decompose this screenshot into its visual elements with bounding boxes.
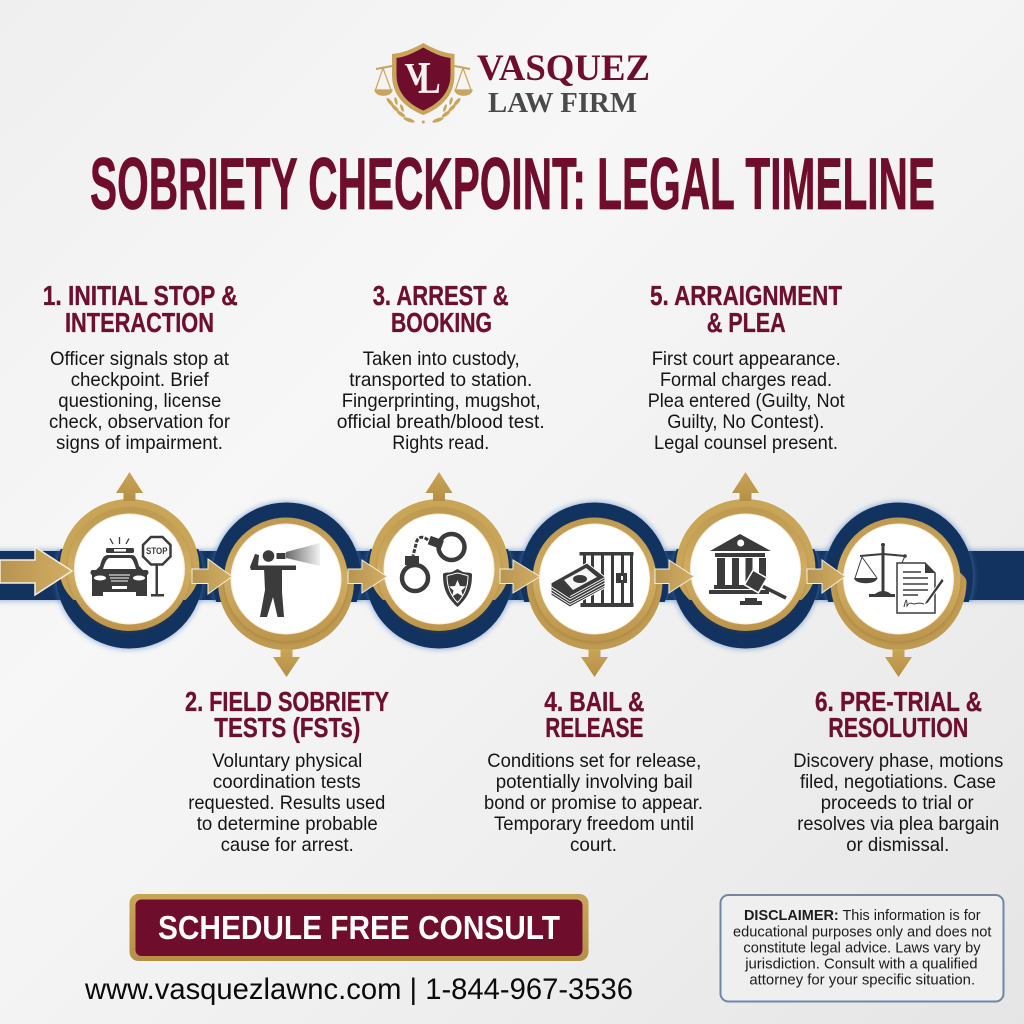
icon: handcuffs and badge bbox=[402, 534, 472, 607]
step 4 node bbox=[519, 502, 670, 652]
step 3 body: Taken into custody, bbox=[363, 348, 520, 370]
step 3 body bbox=[337, 348, 545, 454]
firm name second line: LAW FIRM bbox=[488, 88, 637, 119]
icon: courthouse and gavel bbox=[709, 534, 786, 605]
icon: person with flashlight bbox=[250, 543, 320, 617]
step 6 body: or dismissal. bbox=[846, 834, 949, 856]
timeline band bbox=[0, 550, 1024, 601]
arrow: step 4 to 5 bbox=[655, 560, 694, 593]
step 6 text bbox=[793, 686, 1004, 856]
step 4 heading: RELEASE bbox=[545, 712, 643, 743]
step 4 body: Conditions set for release, bbox=[487, 750, 701, 772]
step 6 heading: RESOLUTION bbox=[828, 712, 968, 743]
step 2 heading: TESTS (FSTs) bbox=[214, 712, 360, 743]
step 4 heading: 4. BAIL & bbox=[544, 686, 644, 717]
step 2 body: requested. Results used bbox=[188, 792, 385, 814]
step 4 body: potentially involving bail bbox=[496, 771, 693, 793]
step 5 text bbox=[648, 280, 845, 454]
step 1 node bbox=[55, 499, 204, 650]
step 3 node bbox=[364, 499, 514, 650]
icon: police car and stop sign: STOP bbox=[146, 546, 168, 556]
step 6 body: Discovery phase, motions bbox=[793, 750, 1004, 772]
arrow: up to step 1 bbox=[116, 472, 143, 501]
step 3 body: Rights read. bbox=[392, 432, 489, 454]
step 5 node bbox=[671, 499, 820, 650]
step 2 body: coordination tests bbox=[213, 771, 361, 793]
arrow: step 2 to 3 bbox=[348, 560, 387, 593]
arrow: up to step 5 bbox=[732, 472, 759, 501]
disclaimer box: jurisdiction. Consult with a qualified bbox=[744, 956, 978, 972]
step 3 heading: 3. ARREST & bbox=[373, 280, 509, 311]
step 3 heading: BOOKING bbox=[391, 307, 492, 338]
disclaimer box: constitute legal advice. Laws vary by bbox=[743, 940, 981, 956]
step 6 heading bbox=[815, 686, 982, 743]
contact line: www.vasquezlawnc.com | 1-844-967-3536 bbox=[84, 973, 633, 1006]
step 2 heading bbox=[185, 686, 389, 743]
step 5 heading: & PLEA bbox=[707, 307, 786, 338]
step 3 heading bbox=[373, 280, 509, 338]
step 6 body: proceeds to trial or bbox=[821, 792, 974, 814]
step 5 body bbox=[648, 348, 845, 454]
step 2 text bbox=[185, 686, 389, 856]
icon: logo shield: L bbox=[418, 52, 441, 103]
disclaimer box: DISCLAIMER: This information is for bbox=[744, 907, 981, 924]
step 5 body: Guilty, No Contest). bbox=[667, 411, 824, 433]
icon: logo laurels bbox=[385, 97, 462, 124]
step 3 body: official breath/blood test. bbox=[337, 411, 545, 433]
step 1 body: check, observation for bbox=[49, 411, 230, 433]
step 1 body: questioning, license bbox=[58, 390, 221, 412]
step 3 text bbox=[337, 280, 545, 454]
step 4 text bbox=[484, 686, 703, 856]
disclaimer box: attorney for your specific situation. bbox=[749, 972, 975, 988]
disclaimer box bbox=[720, 895, 1004, 1002]
step 6 body: filed, negotiations. Case bbox=[800, 771, 996, 793]
step 4 heading bbox=[544, 686, 644, 743]
call to action button bbox=[130, 894, 588, 961]
step 5 body: Plea entered (Guilty, Not bbox=[648, 390, 845, 412]
disclaimer box: educational purposes only and does not bbox=[733, 924, 992, 940]
icon: scales and signed document bbox=[854, 543, 944, 613]
step 6 node bbox=[823, 502, 974, 652]
step 1 body bbox=[49, 348, 230, 454]
step 2 body bbox=[188, 750, 385, 856]
step 1 text bbox=[43, 280, 238, 454]
logo bbox=[375, 43, 650, 124]
step 3 body: transported to station. bbox=[349, 369, 532, 391]
step 2 body: cause for arrest. bbox=[221, 834, 354, 856]
firm name: VASQUEZ bbox=[477, 48, 650, 89]
step 1 body: Officer signals stop at bbox=[50, 348, 230, 370]
step 3 body: Fingerprinting, mugshot, bbox=[342, 390, 541, 412]
step 4 body bbox=[484, 750, 703, 856]
step 4 body: court. bbox=[570, 834, 617, 856]
step 4 body: Temporary freedom until bbox=[494, 813, 694, 835]
step 5 heading: 5. ARRAIGNMENT bbox=[650, 280, 842, 311]
step 5 body: Legal counsel present. bbox=[654, 432, 838, 454]
icon: logo shield bbox=[392, 43, 454, 115]
step 1 heading bbox=[43, 280, 238, 338]
step 1 body: signs of impairment. bbox=[56, 432, 223, 454]
step 1 heading: 1. INITIAL STOP & bbox=[43, 280, 238, 311]
arrow: down to step 2 bbox=[273, 649, 300, 677]
icon: cash and jail bars bbox=[551, 552, 634, 607]
step 2 body: Voluntary physical bbox=[212, 750, 362, 772]
step 6 heading: 6. PRE-TRIAL & bbox=[815, 686, 982, 717]
arrow: step 3 to 4 bbox=[500, 560, 540, 593]
step 5 body: First court appearance. bbox=[652, 348, 841, 370]
step 2 heading: 2. FIELD SOBRIETY bbox=[185, 686, 389, 717]
arrow: down to step 6 bbox=[885, 649, 912, 677]
step 2 body: to determine probable bbox=[197, 813, 378, 835]
arrow: timeline start bbox=[0, 547, 72, 595]
arrow: step 1 to 2 bbox=[192, 559, 232, 594]
step 1 body: checkpoint. Brief bbox=[71, 369, 209, 391]
step 4 body: bond or promise to appear. bbox=[484, 792, 703, 814]
arrow: down to step 4 bbox=[581, 649, 608, 677]
icon: logo scales bbox=[375, 66, 472, 95]
step 5 heading bbox=[650, 280, 842, 338]
arrow: up to step 3 bbox=[426, 472, 452, 501]
icon: police car and stop sign bbox=[90, 537, 170, 596]
step 6 body: resolves via plea bargain bbox=[797, 813, 999, 835]
step 6 body bbox=[793, 750, 1004, 856]
icon: logo shield: V bbox=[404, 56, 428, 92]
step 1 heading: INTERACTION bbox=[65, 307, 214, 338]
step 2 node bbox=[211, 502, 362, 652]
arrow: step 5 to 6 bbox=[807, 560, 845, 593]
call to action button: SCHEDULE FREE CONSULT bbox=[158, 909, 560, 946]
step 5 body: Formal charges read. bbox=[660, 369, 832, 391]
